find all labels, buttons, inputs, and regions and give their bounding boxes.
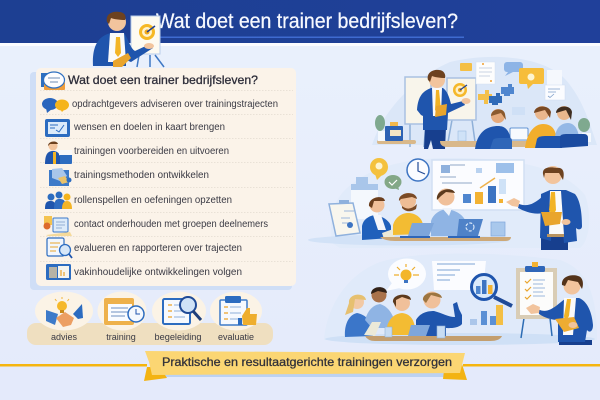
icon: begeleiding	[152, 292, 206, 330]
scene: group discussion with board	[308, 158, 589, 250]
row: methoden	[49, 168, 209, 186]
icon: training	[98, 292, 146, 330]
panel: tasks list	[30, 68, 296, 290]
panel heading: Wat doet een trainer bedrijfsleven?	[68, 73, 258, 87]
row: trainingen: trainingen voorbereiden en uitvoeren	[74, 146, 229, 157]
trainer	[417, 70, 470, 149]
icon: evaluatie	[210, 292, 262, 330]
magnifier	[472, 274, 512, 306]
scene: trainer presenting to group	[372, 57, 597, 149]
table with laptop and cups	[365, 325, 502, 341]
banner: practical trainings	[0, 351, 600, 381]
report paper	[432, 261, 486, 290]
row: rollenspellen	[45, 192, 232, 209]
scene: evaluation with magnifier	[324, 254, 597, 345]
row: evalueren: evalueren en rapporteren over trajecten	[74, 243, 242, 254]
bar chart	[470, 305, 503, 325]
participants	[362, 188, 475, 240]
audience	[475, 106, 588, 149]
title: Wat doet een trainer bedrijfsleven?	[156, 10, 458, 33]
row: contact	[44, 216, 268, 236]
row: contact: contact onderhouden met groepen deelnemers	[74, 219, 268, 230]
row: vakinhoudelijke: vakinhoudelijke ontwikkelingen volgen	[74, 267, 242, 278]
row: evalueren	[47, 238, 242, 258]
row: trainingen	[45, 142, 229, 164]
board	[432, 160, 524, 210]
trainer right	[526, 275, 593, 345]
row: rollenspellen: rollenspellen en oefeningen opzetten	[74, 195, 232, 206]
label: training: training	[106, 332, 136, 342]
table with laptops	[380, 219, 511, 241]
table	[440, 141, 550, 147]
icon: advies	[35, 292, 93, 330]
row: wensen	[45, 119, 225, 137]
participants	[345, 287, 462, 337]
row: vakinhoudelijke	[46, 264, 242, 280]
row: wensen: wensen en doelen in kaart brengen	[73, 122, 225, 133]
plant	[578, 118, 591, 142]
row: methoden: trainingsmethoden ontwikkelen	[74, 170, 209, 181]
label: begeleiding: begeleiding	[154, 332, 202, 342]
row: adviseren	[42, 98, 278, 113]
banner: practical trainings: Praktische en resultaatgerichte trainingen verzorgen	[162, 355, 452, 369]
speech bubbles	[370, 158, 402, 190]
label: evaluatie: evaluatie	[218, 332, 254, 342]
label: advies: advies	[51, 332, 78, 342]
left desk	[375, 115, 466, 144]
floating ideas	[460, 62, 565, 115]
checklist board	[516, 262, 557, 338]
panel heading icon	[41, 72, 65, 90]
icon: trainer with flipchart in header	[93, 12, 164, 67]
row: adviseren: opdrachtgevers adviseren over trainingstrajecten	[72, 99, 278, 110]
clipboards	[329, 177, 378, 236]
header band	[0, 0, 600, 46]
flipcharts	[405, 77, 476, 147]
idea bubble	[386, 258, 426, 291]
clock	[407, 159, 429, 181]
trainer right	[506, 166, 582, 250]
panel: four themes strip	[27, 292, 273, 345]
